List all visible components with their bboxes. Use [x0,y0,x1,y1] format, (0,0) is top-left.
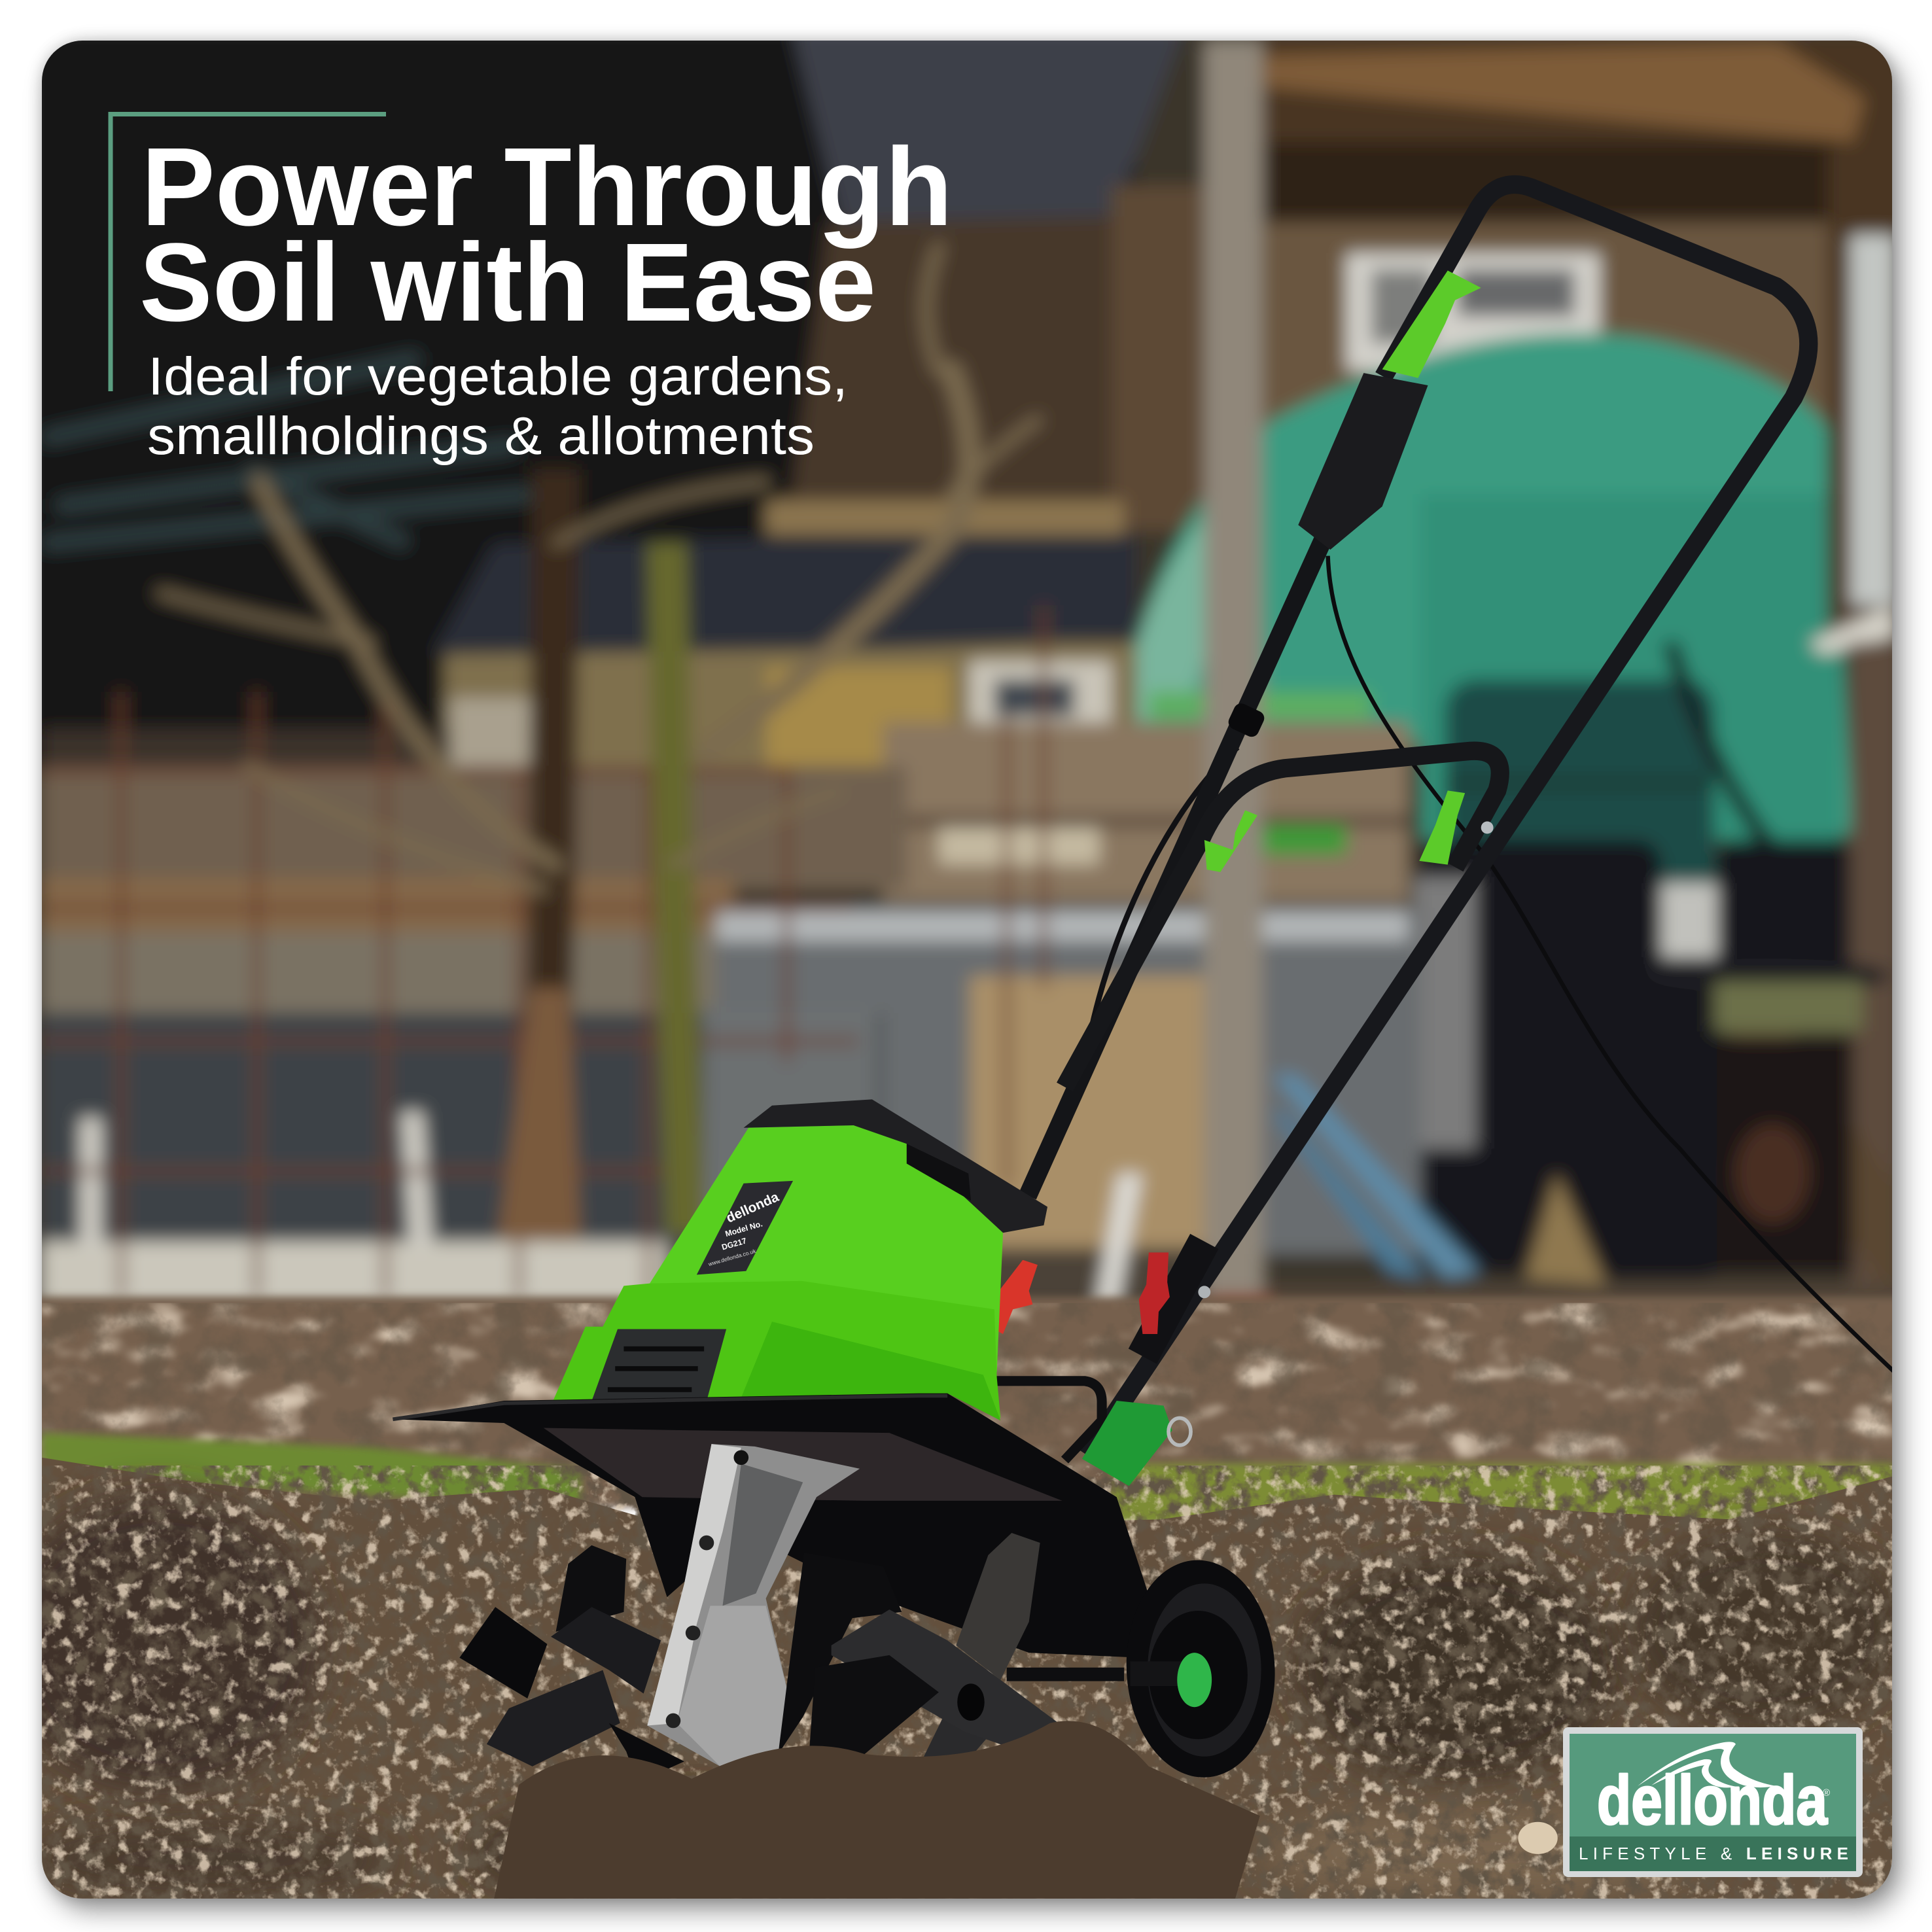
heading bracket [111,114,386,391]
top vents [907,1144,971,1201]
subheading [147,347,848,466]
motor upper housing [650,1125,1003,1373]
green knob upper right [1419,790,1465,865]
subheading: smallholdings & allotments [147,406,815,466]
logo tagline: LIFESTYLE & LEISURE [1579,1844,1848,1863]
green knob upper left [1204,811,1257,872]
model label: www.dellonda.co.uk [707,1248,757,1267]
model label: dellonda [724,1189,781,1226]
registered mark: ® [1823,1787,1830,1799]
shield reflection [544,1428,1063,1501]
tiller product [393,184,1896,1899]
ring pin [1168,1418,1191,1445]
switch box [1298,373,1428,550]
wheel axle [1007,1668,1124,1681]
model label: DG217 [720,1236,748,1252]
green bracket [1082,1401,1172,1486]
main handle frame [1087,184,1808,1455]
heading [139,125,953,345]
bolt [1481,822,1494,834]
tine shield [393,1394,1163,1658]
mid handle bar [1064,751,1500,1087]
front vent [590,1329,726,1406]
cable [1328,556,1896,1373]
bolt lower [1198,1286,1210,1298]
cable clamp [1226,701,1267,739]
heading: Soil with Ease [139,220,876,345]
logo wave [1638,1742,1776,1787]
wheel [1121,1556,1280,1782]
lower side panel [740,1322,1000,1420]
heading: Power Through [141,125,953,249]
foreground soil [0,1458,1903,1908]
red knob right [1139,1252,1170,1334]
logo wordmark: dellonda [1597,1762,1828,1839]
distant soil [25,1297,1914,1507]
grass strip [42,1430,1892,1520]
blurred garden background [25,25,1914,1384]
motor lower housing [551,1281,1000,1418]
soil at tine base [494,1721,1260,1899]
top lip highlight [393,1396,947,1419]
left tines [459,1545,684,1782]
secondary cable [1057,747,1238,1142]
lower shaft [1028,537,1324,1196]
dellonda logo badge [1563,1727,1863,1877]
lower sleeve [1142,1241,1204,1356]
model label [697,1181,793,1274]
green grip [1382,270,1481,378]
small support handle [994,1381,1102,1460]
motor top cover [744,1099,1047,1233]
model label: Model No. [724,1219,764,1238]
red knob left [989,1260,1038,1334]
gearbox [647,1444,860,1766]
right tines [778,1533,1059,1764]
subheading: Ideal for vegetable gardens, [148,347,848,406]
